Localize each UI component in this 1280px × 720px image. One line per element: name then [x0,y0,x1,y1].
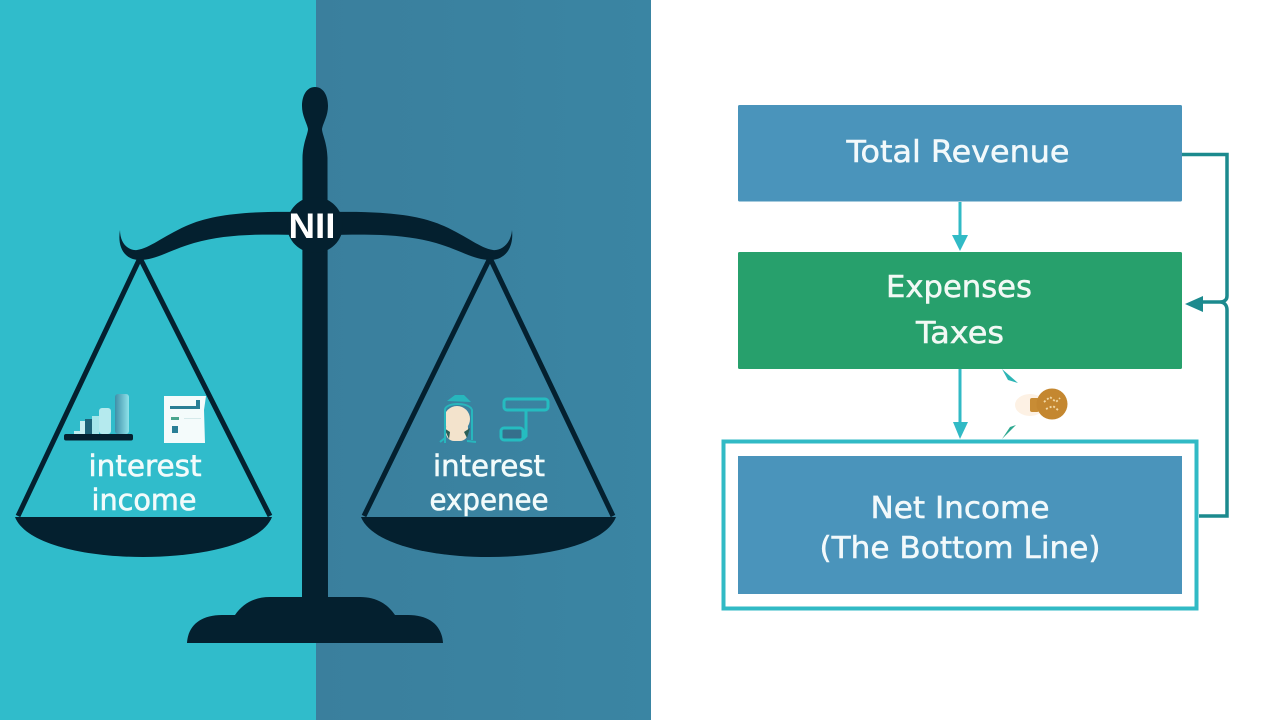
arrow: feedback connector [1182,154,1227,516]
label: interest expense: interest [433,449,545,483]
label: interest expense [430,449,548,517]
NII hub: NII [288,207,336,246]
icon: bar chart [64,394,133,440]
box: Net Income: (The Bottom Line) [820,531,1100,566]
NII hub [287,197,343,253]
label: interest income [88,449,202,517]
box: Total Revenue [738,105,1182,202]
box: Net Income: Net Income [870,491,1050,526]
box: Expenses and Taxes [738,252,1182,369]
scale beam [119,212,512,260]
small arrow top [1002,369,1018,383]
right pan [361,517,616,557]
box: Net Income [724,442,1196,608]
arrow: revenue to expenses [952,202,968,251]
icon: flowchart [501,399,548,440]
label: interest expense: expenee [430,483,548,517]
icon: document [164,396,206,443]
right pan strings [364,258,613,516]
left pan [15,517,272,557]
left pan strings [18,258,270,516]
icon: person [440,395,476,443]
box: Expenses and Taxes: Taxes [915,316,1004,351]
scale base [187,597,443,643]
balance scale illustration [15,87,616,643]
box: Expenses and Taxes: Expenses [886,270,1032,305]
icon: light bulb [1002,369,1068,439]
arrow: expenses to net income [953,369,968,439]
label: interest income: income [92,483,196,517]
box: Total Revenue: Total Revenue [845,135,1070,170]
label: interest income: interest [88,449,202,483]
small arrow bottom [1002,425,1016,439]
scale post [302,87,328,600]
